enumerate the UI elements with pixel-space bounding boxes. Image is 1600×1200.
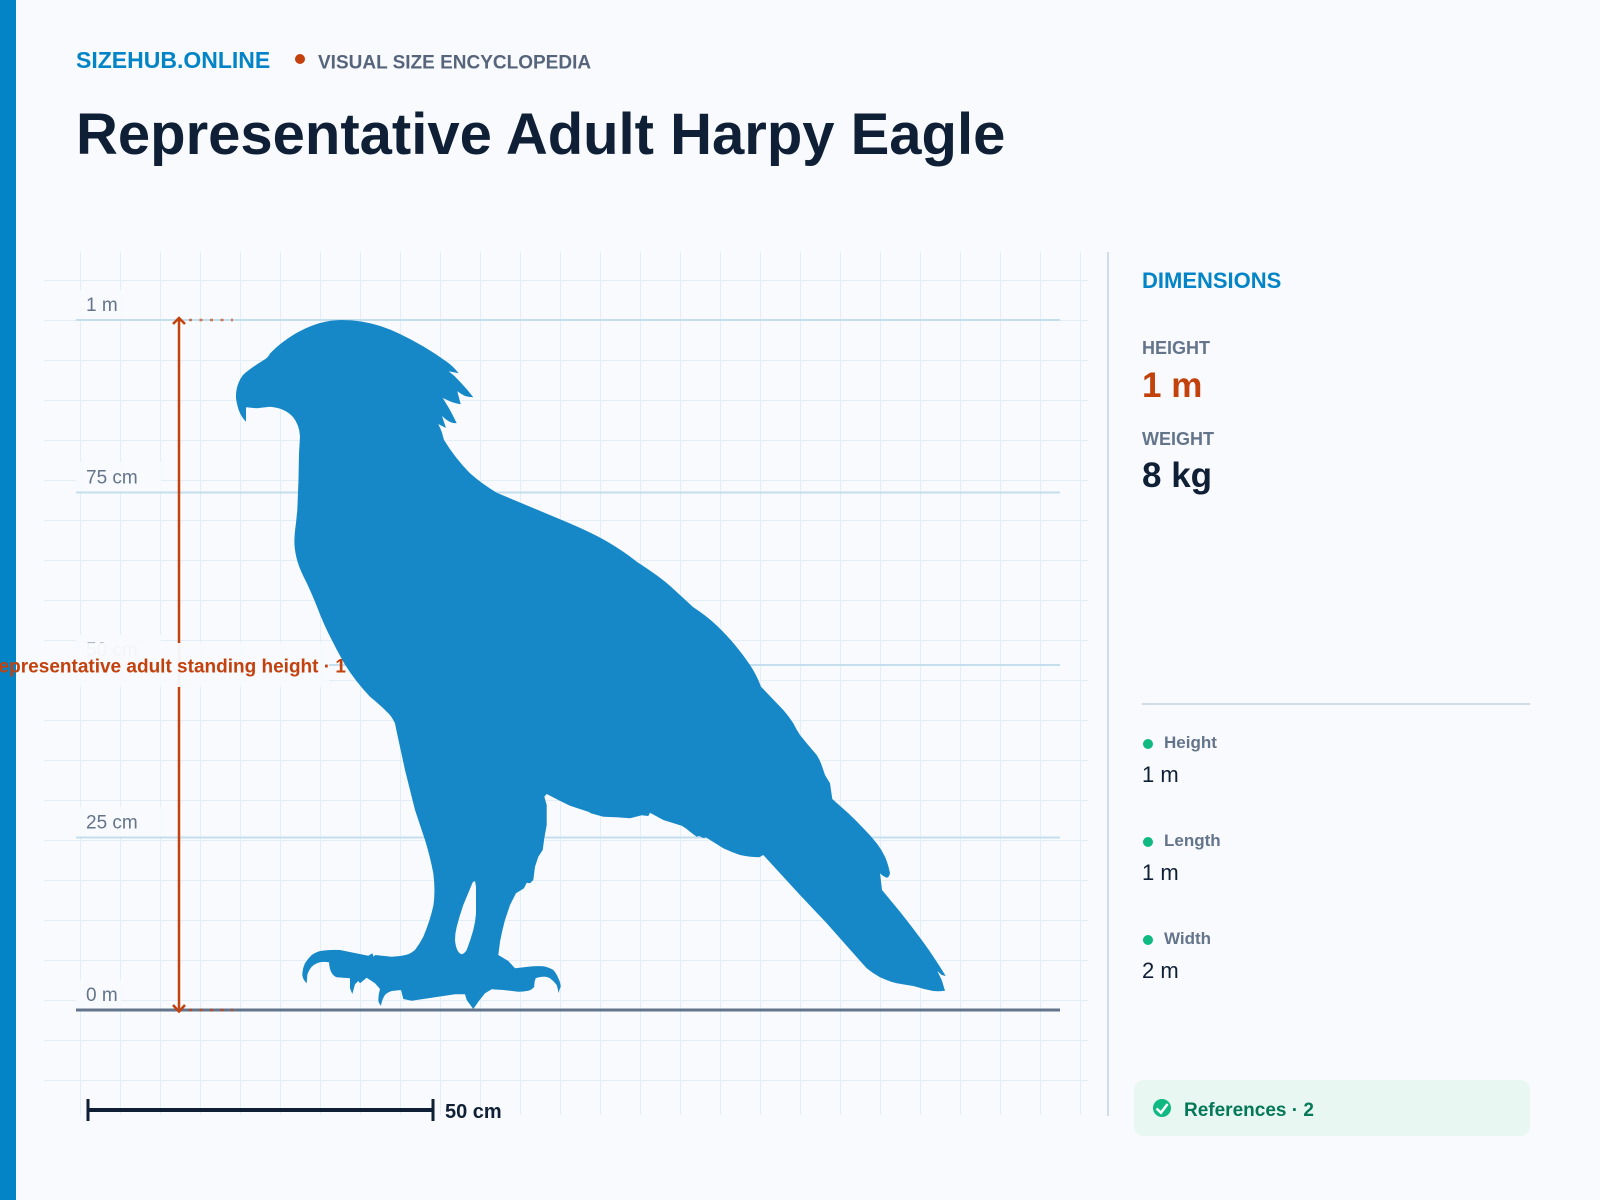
panel: dimensions: DIMENSIONS [1142,268,1281,293]
title: Representative Adult Harpy Eagle [76,102,1005,167]
axis labels: 50 cm [86,640,138,661]
panel: dimensions: WEIGHT [1142,429,1214,449]
header: brand line [76,47,591,74]
panel: measurement list [1142,733,1221,983]
panel: dimensions [1142,268,1281,495]
axis labels [76,290,161,1009]
eagle silhouette [236,320,946,1009]
header: brand line: SIZEHUB.ONLINE [76,47,270,73]
references badge: References · 2 [1184,1100,1314,1121]
left accent bar [0,0,16,1200]
panel divider [1107,252,1109,1116]
scale bar: 50 cm [445,1101,502,1123]
panel: measurement list: 1 m [1142,762,1179,787]
chart: height scale with silhouette [0,252,1088,1115]
panel: dimensions: HEIGHT [1142,338,1210,358]
axis labels: 25 cm [86,812,138,834]
axis labels: 75 cm [86,468,138,488]
reference lines [76,320,1060,838]
panel: measurement list: Height [1164,733,1217,752]
arrow tip on ground [173,1005,233,1012]
ground line [76,1008,1060,1012]
panel: dimensions: 8 kg [1142,456,1212,495]
panel: measurement list: 2 m [1142,958,1179,983]
panel: measurement list: Length [1164,831,1221,850]
arrow annotation backing [29,643,329,687]
panel: measurement list: 1 m [1142,860,1179,885]
panel: measurement list: Width [1164,929,1211,948]
axis labels: 0 m [86,985,118,1006]
header: brand line: VISUAL SIZE ENCYCLOPEDIA [318,52,591,74]
panel: dimensions: 1 m [1142,366,1202,405]
references badge [1134,1080,1530,1136]
height arrow line [173,318,233,1012]
axis labels: 1 m [86,295,118,316]
